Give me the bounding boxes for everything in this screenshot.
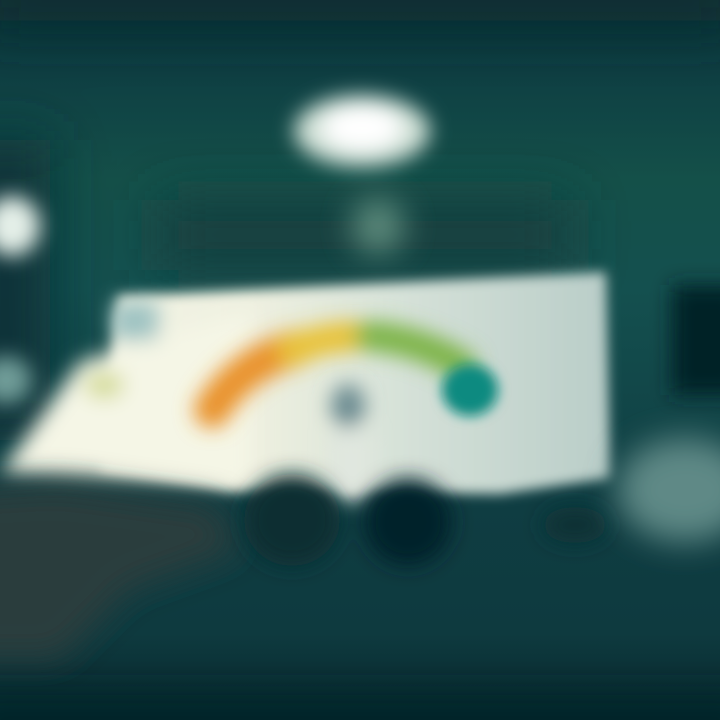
paper sheet at left [0, 302, 250, 486]
gauge needle and figure [331, 384, 370, 500]
right dark screen [672, 285, 720, 395]
whiteboard panel [100, 272, 610, 494]
gauge segment: green [370, 336, 462, 366]
heads of seated audience [244, 474, 607, 566]
wall shadows [0, 0, 720, 440]
gauge end dot [442, 364, 498, 416]
gauge segment: orange [212, 348, 296, 410]
right side chair highlight [617, 438, 720, 542]
gauge segment: yellow [292, 336, 352, 350]
foreground dark shape lower left [0, 484, 240, 660]
floor band [0, 695, 720, 720]
left wall lights [0, 196, 40, 404]
ceiling light [294, 95, 430, 167]
small hanging lamp [352, 198, 404, 254]
gauge arc [212, 336, 462, 410]
